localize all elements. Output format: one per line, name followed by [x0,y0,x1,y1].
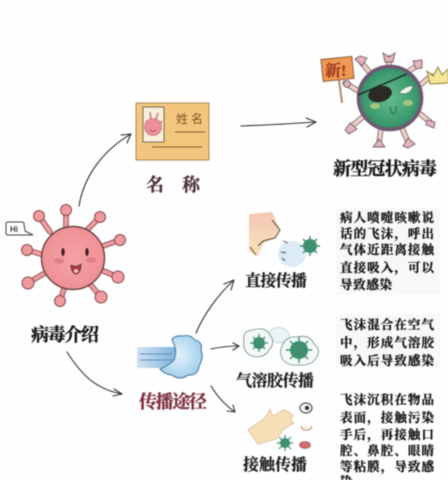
arrow: name to new coronavirus [241,118,316,127]
eye patch [358,74,407,105]
text block: aerosol transmission description: 中，形成气溶胶 [340,335,435,350]
text block: direct transmission description [336,208,440,294]
icon: new sign [321,56,354,103]
text block: direct transmission description: 导致感染 [340,277,392,292]
card photo [143,107,164,142]
icon: Hi speech bubble [6,222,33,235]
panel: contact transmission [243,403,312,474]
text block: contact transmission description: 手后，再接触口 [340,427,434,442]
heading: new coronavirus: 新型冠状病毒 [333,158,437,179]
heading: name: 名称 [146,175,202,195]
card name label: 姓名 [176,110,203,127]
heading: transmission routes: 传播途径 [139,391,208,412]
icon: green virus [277,435,293,451]
label: contact transmission: 接触传播 [243,455,307,474]
panel: direct transmission [245,212,320,290]
label: aerosol transmission: 气溶胶传播 [236,371,314,390]
text block: contact transmission description: 腔、鼻腔、眼睛 [340,443,434,458]
icon: green coronavirus mascot [344,53,435,148]
icon: aerosol clouds with viruses [244,327,319,365]
icon: hand [248,409,294,444]
panel: name card [136,103,209,160]
panel: aerosol transmission [236,327,319,390]
text block: contact transmission description: 等粘膜，导致感 [340,459,435,474]
text block: aerosol transmission description: 飞沫混合在空气 [340,317,434,332]
text block: aerosol transmission description [336,314,440,368]
text block: contact transmission description [340,392,435,480]
heading: virus introduction: 病毒介绍 [31,325,99,345]
icon: green virus small [300,236,320,256]
arrow: to aerosol transmission [211,343,239,350]
label: direct transmission: 直接传播 [245,271,307,290]
text block: direct transmission description: 话的飞沫，呼出 [340,226,434,241]
icon: eye [300,403,312,413]
icon: nose [301,426,312,430]
text block: direct transmission description: 病人喷嚏咳嗽说 [340,210,434,225]
text block: direct transmission description: 直接吸入，可以 [340,260,435,275]
icon: Hi speech bubble: Hi [10,225,18,234]
icon: pink virus mascot [22,204,126,306]
text block: contact transmission description: 飞沫沉积在物品 [340,392,434,407]
icon: crown [427,67,448,84]
icon: breath cloud [137,336,202,378]
icon: mouth [300,442,310,448]
arrow: intro to transmission [67,352,122,396]
text block: contact transmission description: 表面，接触污染 [340,410,434,425]
arrow: intro to name [79,134,131,206]
text block: direct transmission description: 气体近距离接触 [340,242,435,257]
arrow: to direct transmission [196,280,234,333]
text block: aerosol transmission description: 吸入后导致感染 [340,353,434,368]
arrow: to contact transmission [211,386,235,412]
icon: new sign: 新! [325,62,346,80]
icon: face breathing [249,212,306,267]
